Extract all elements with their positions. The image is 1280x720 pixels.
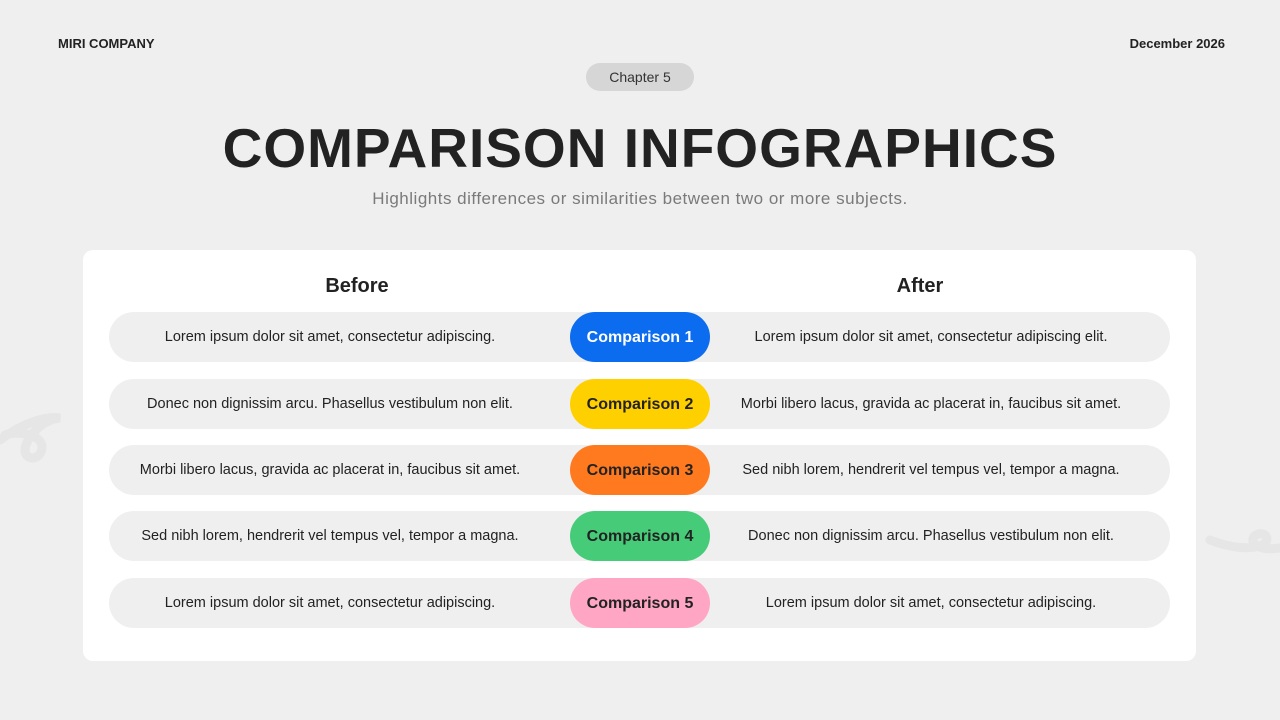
row 2: Morbi libero lacus, gravida ac placerat in, faucibus sit amet.: [741, 396, 1121, 412]
row 3: [109, 445, 1170, 495]
subtitle: Highlights differences or similarities between two or more subjects.: [372, 189, 908, 208]
row 2: [109, 379, 1170, 429]
panel: comparison table: [83, 250, 1196, 661]
row 3: Comparison 3: [587, 462, 693, 479]
row 5: Lorem ipsum dolor sit amet, consectetur adipiscing.: [766, 595, 1096, 611]
row 3: Sed nibh lorem, hendrerit vel tempus vel, tempor a magna.: [742, 462, 1120, 478]
row 1: Lorem ipsum dolor sit amet, consectetur adipiscing elit.: [754, 329, 1108, 345]
row 4: [109, 511, 1170, 561]
row 3: Morbi libero lacus, gravida ac placerat in, faucibus sit amet.: [140, 462, 520, 478]
row 5: [109, 578, 1170, 628]
row 5: Comparison 5: [587, 595, 693, 612]
row 2: Comparison 2: [587, 396, 693, 413]
row 4: Comparison 4: [587, 528, 693, 545]
date: December 2026: [1130, 36, 1225, 51]
heading: after: After: [897, 275, 943, 297]
row 1: Lorem ipsum dolor sit amet, consectetur adipiscing.: [165, 329, 495, 345]
chapter pill: Chapter 5: [609, 69, 671, 85]
row 4: Sed nibh lorem, hendrerit vel tempus vel, tempor a magna.: [141, 528, 519, 544]
row 1: [109, 312, 1170, 362]
title: COMPARISON INFOGRAPHICS: [223, 117, 1057, 179]
heading: before: Before: [325, 275, 389, 297]
company name: MIRI COMPANY: [58, 36, 155, 51]
row 1: Comparison 1: [587, 329, 693, 346]
row 5: Lorem ipsum dolor sit amet, consectetur adipiscing.: [165, 595, 495, 611]
row 4: Donec non dignissim arcu. Phasellus vestibulum non elit.: [748, 528, 1114, 544]
row 2: Donec non dignissim arcu. Phasellus vestibulum non elit.: [147, 396, 513, 412]
chapter pill: [586, 63, 694, 91]
